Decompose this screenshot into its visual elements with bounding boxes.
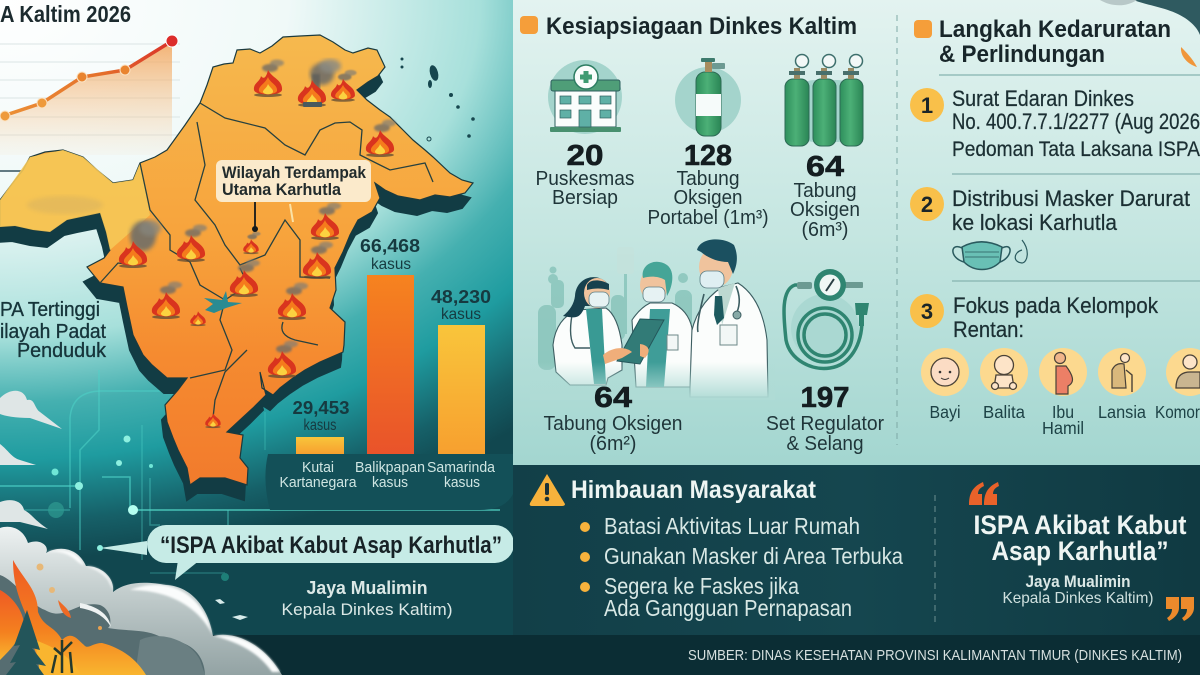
- stat: 128 portable tanks: Tabung: [676, 167, 740, 190]
- step 3: [910, 293, 1159, 342]
- stat: 64 tanks (6m²): (6m²): [590, 432, 636, 455]
- map: western lobe: [0, 150, 150, 250]
- icon: large oxygen tanks: [785, 54, 863, 146]
- bar chart: cases by region: kasus: [371, 256, 411, 273]
- bar chart: cases by region: Balikpapan: [355, 460, 425, 476]
- step 2: 2: [921, 192, 933, 217]
- stat: 197 regulators: 197: [800, 382, 850, 414]
- heading: Himbauan Masyarakat: Himbauan Masyarakat: [571, 476, 817, 504]
- bar chart: cases by region: Kartanegara: [280, 475, 357, 491]
- icon: puskesmas building: [548, 60, 622, 134]
- text: quote attribution: Kepala Dinkes Kaltim): [282, 600, 452, 619]
- quote: right: Asap Karhutla”: [992, 536, 1168, 566]
- step 1: Surat Edaran Dinkes: [952, 86, 1134, 111]
- stat: 64 tanks (6m²): 64: [594, 382, 632, 414]
- icon: balita: [980, 348, 1028, 396]
- chart: trend line: [0, 35, 180, 171]
- bar chart: cases by region: [280, 235, 496, 491]
- flames: [13, 560, 146, 675]
- stat: 64 large tanks: 64: [806, 151, 844, 183]
- step 2: [910, 186, 1190, 235]
- text: highest ISPA note: Penduduk: [17, 339, 107, 362]
- panel: bar chart base: [265, 454, 513, 510]
- list: advisories: Gunakan Masker di Area Terbuka: [604, 543, 903, 569]
- icon: drifting smoke wisps: [0, 391, 62, 529]
- stat: 128 portable tanks: Oksigen: [674, 186, 742, 209]
- heading: Langkah Kedaruratan: & Perlindungan: [939, 41, 1105, 68]
- panel: circuit network: [0, 370, 500, 581]
- doctor: middle: [632, 262, 692, 387]
- bar chart: cases by region: Kutai: [302, 460, 334, 476]
- illustration: medical staff: [530, 239, 775, 400]
- trees: [6, 610, 46, 675]
- speech bubble: quote: [97, 525, 514, 580]
- step 1: 1: [921, 93, 933, 118]
- list: advisories: Batasi Aktivitas Luar Rumah: [604, 513, 860, 539]
- footer bar: [0, 635, 1200, 675]
- stat: 20 puskesmas: Bersiap: [552, 186, 618, 209]
- bar chart: cases by region: 29,453: [292, 397, 350, 418]
- stat: 64 large tanks: Oksigen: [790, 198, 860, 221]
- icon: ibu hamil: [1039, 348, 1087, 396]
- quote: right: [974, 510, 1186, 607]
- stat: 197 regulators: [766, 382, 884, 455]
- panel: public advisory band: [513, 465, 1200, 635]
- divider: dashed column: [896, 15, 898, 445]
- bar chart: cases by region: kasus: [304, 417, 336, 434]
- stat: 20 puskesmas: Puskesmas: [536, 167, 634, 190]
- labels: vulnerable groups: Balita: [983, 402, 1025, 422]
- step 3: 3: [921, 299, 933, 324]
- bar chart: cases by region: kasus: [441, 306, 481, 323]
- labels: vulnerable groups: Bayi: [930, 402, 960, 422]
- map: Kalimantan Timur: [0, 35, 473, 500]
- callout: affected region: [216, 160, 371, 232]
- labels: vulnerable groups: [930, 402, 1200, 438]
- stat: 20 puskesmas: 20: [566, 140, 604, 172]
- quote: right: ISPA Akibat Kabut: [974, 510, 1186, 540]
- icon: bayi: [921, 348, 969, 396]
- stat: 64 tanks (6m²): [544, 382, 682, 455]
- labels: vulnerable groups: Lansia: [1098, 402, 1146, 422]
- icon: closing quote mark: [1166, 597, 1194, 621]
- labels: vulnerable groups: Hamil: [1042, 418, 1084, 438]
- stat: 64 tanks (6m²): Tabung Oksigen: [544, 412, 682, 435]
- title: A Kaltim 2026: [0, 1, 131, 27]
- step 3: Fokus pada Kelompok: [953, 293, 1159, 318]
- panel: preparedness and emergency steps: [513, 0, 1200, 465]
- callout: affected region: Utama Karhutla: [222, 180, 342, 199]
- step 2: Distribusi Masker Darurat: [952, 186, 1190, 211]
- stat: 197 regulators: Set Regulator: [766, 412, 884, 435]
- stat: 64 large tanks: Tabung: [794, 179, 856, 202]
- icon: lansia: [1098, 348, 1146, 396]
- icon: regulator and hose: [784, 269, 869, 368]
- bar chart: cases by region: kasus: [444, 475, 480, 491]
- stat: 64 large tanks: [790, 151, 860, 241]
- step 3: Rentan:: [953, 317, 1024, 342]
- callout: affected region: Wilayah Terdampak: [222, 163, 366, 182]
- labels: vulnerable groups: Ibu: [1052, 402, 1074, 422]
- stat: 128 portable tanks: Portabel (1m³): [648, 206, 768, 229]
- icon: portable oxygen tank: [675, 58, 741, 136]
- illustration: smoke and forest fire: [0, 527, 282, 675]
- bar chart: cases by region: 48,230: [431, 286, 491, 307]
- doctor: right: [690, 239, 768, 397]
- bar chart: cases by region: kasus: [372, 475, 408, 491]
- list: advisories: Segera ke Faskes jika: [604, 573, 799, 599]
- stat: 64 large tanks: (6m³): [802, 218, 848, 241]
- stat: 20 puskesmas: [536, 140, 634, 209]
- icon: fire markers on the map: [119, 59, 396, 428]
- stat: 128 portable tanks: [648, 140, 768, 229]
- map: region borders: [100, 103, 433, 418]
- text: highest ISPA note: [0, 298, 107, 362]
- step 1: [910, 86, 1200, 161]
- icon: small islands: [400, 58, 475, 141]
- speech bubble: quote: “ISPA Akibat Kabut Asap Karhutla”: [160, 532, 502, 559]
- stat: 128 portable tanks: 128: [684, 140, 732, 172]
- heading: Langkah Kedaruratan: [914, 16, 1171, 68]
- icon: opening quote mark: [969, 482, 999, 505]
- quote: right: Jaya Mualimin: [1026, 573, 1130, 591]
- bar chart: cases by region: 66,468: [360, 235, 420, 256]
- quote: right: Kepala Dinkes Kaltim): [1002, 590, 1154, 607]
- heading: Langkah Kedaruratan: Langkah Kedaruratan: [939, 16, 1171, 43]
- text: quote attribution: [282, 578, 452, 619]
- doctor: left: [553, 277, 664, 385]
- icon: face mask: [953, 240, 1027, 270]
- step 2: ke lokasi Karhutla: [952, 210, 1118, 235]
- list: advisories: [580, 513, 903, 621]
- left panel background: [0, 0, 513, 640]
- bar chart: cases by region: Samarinda: [427, 460, 496, 476]
- icon: warning triangle: [530, 474, 565, 506]
- list: advisories: Ada Gangguan Pernapasan: [604, 595, 852, 621]
- text: highest ISPA note: PA Tertinggi: [0, 298, 100, 321]
- decoration: corner smoke and ember: [1100, 0, 1200, 67]
- stat: 197 regulators: & Selang: [786, 432, 864, 455]
- text: highest ISPA note: ilayah Padat: [0, 320, 106, 343]
- text: quote attribution: Jaya Mualimin: [306, 578, 428, 598]
- heading: Kesiapsiagaan: Kesiapsiagaan Dinkes Kaltim: [546, 13, 857, 40]
- icon: komorbid: [1166, 348, 1200, 396]
